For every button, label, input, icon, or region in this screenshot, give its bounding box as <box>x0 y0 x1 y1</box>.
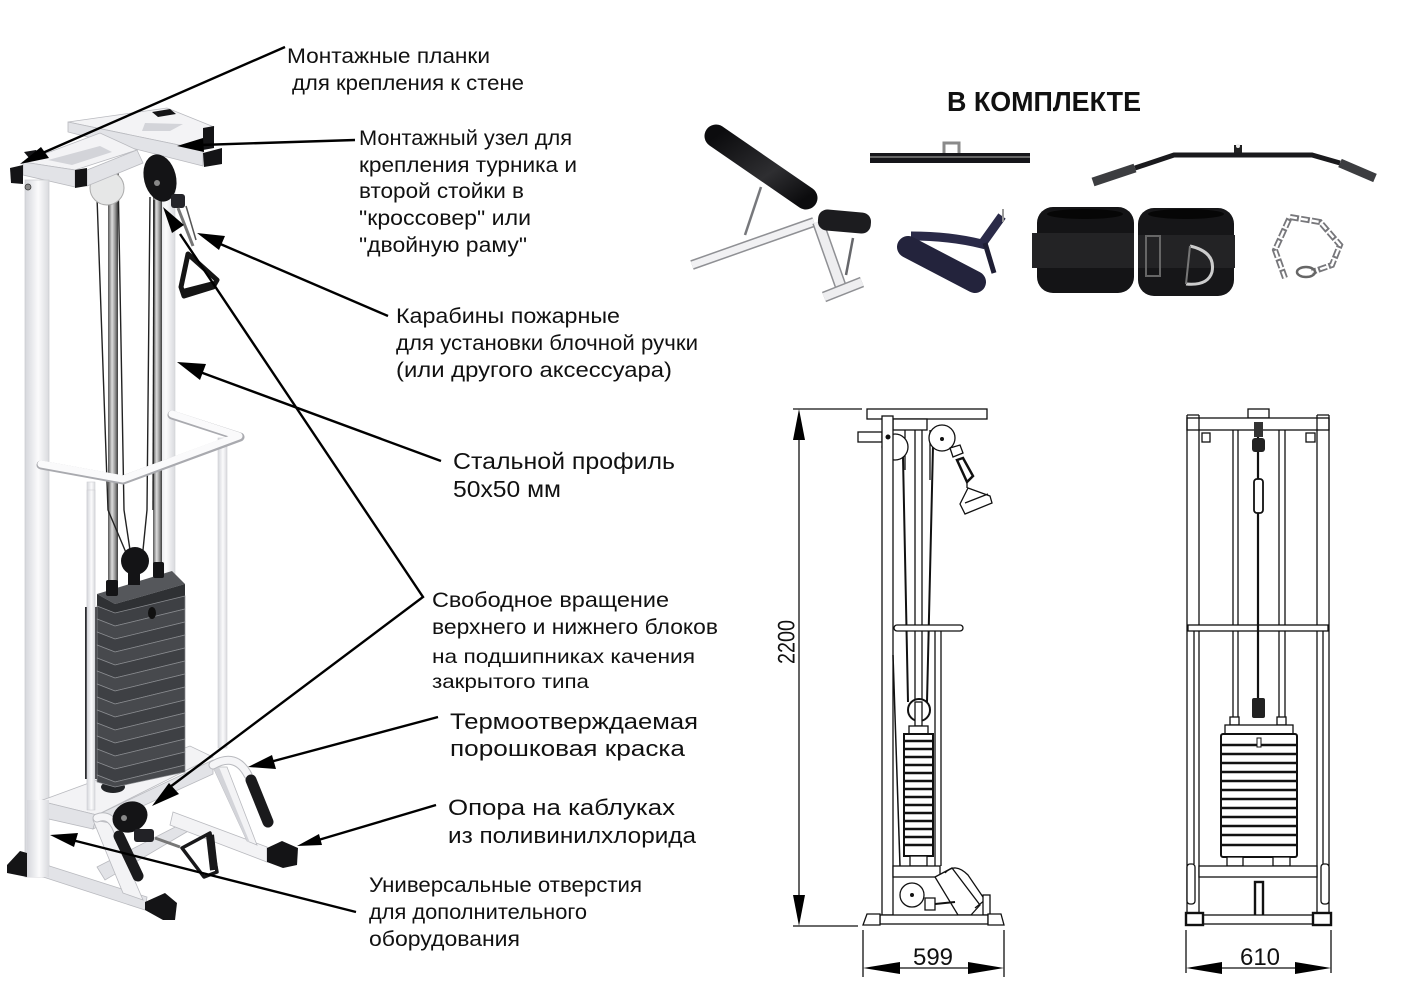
left post lower overlay <box>27 800 49 877</box>
callout: carabiners <box>396 305 698 382</box>
callout: free rotation: Свободное вращение <box>432 589 669 612</box>
cables <box>97 173 154 555</box>
accessory: bench <box>692 136 872 297</box>
rubber feet <box>7 841 298 920</box>
callout: carabiners: Карабины пожарные <box>396 305 620 328</box>
white top pulley <box>90 171 124 205</box>
drawing: side view <box>773 409 1004 977</box>
callout: free rotation: на подшипниках качения <box>432 646 695 668</box>
block pulley <box>121 547 149 585</box>
thin handle supports <box>87 438 227 807</box>
dimension 599: 599 <box>913 944 953 971</box>
callout: steel profile: Стальной профиль <box>453 448 675 474</box>
callout: universal holes: оборудования <box>369 928 520 951</box>
accessory: straight bar <box>870 143 1030 163</box>
base frame <box>40 746 267 910</box>
callout: mounting plates: для крепления к стене <box>292 72 524 95</box>
bent grip arms <box>97 760 248 835</box>
top plate <box>97 571 185 604</box>
arrow: mounting plates <box>20 47 285 164</box>
top plate <box>867 409 987 419</box>
dimension 2200: 2200 <box>773 620 800 664</box>
rear post <box>155 190 175 575</box>
black top pulley <box>139 151 185 208</box>
callout: mounting node: "кроссовер" или <box>359 207 531 230</box>
plates <box>97 596 185 787</box>
base assembly <box>863 866 1004 925</box>
callout: free rotation: верхнего и нижнего блоков <box>432 616 718 639</box>
arrow: universal holes <box>50 833 356 912</box>
arrow: carabiners <box>197 233 388 316</box>
weight stack <box>1221 717 1297 866</box>
dimension 2200 <box>773 409 862 926</box>
selector pin <box>148 607 156 619</box>
back stripe behind stack <box>85 607 97 779</box>
callout: universal holes: для дополнительного <box>369 901 587 924</box>
callout: heels <box>448 795 697 848</box>
callout: powder paint <box>450 709 698 761</box>
black grips <box>119 780 268 876</box>
callout: mounting plates <box>287 45 524 95</box>
arrow: powder paint <box>248 717 438 769</box>
callout: powder paint: порошковая краска <box>450 736 686 761</box>
block and weight stack <box>904 699 933 866</box>
accessory: lat bar <box>1093 144 1375 182</box>
callout: universal holes <box>369 874 642 951</box>
bolt <box>25 184 31 190</box>
cable and carabiner <box>1252 422 1265 718</box>
callout: steel profile: 50х50 мм <box>453 476 561 502</box>
top block <box>1248 409 1269 418</box>
weight stack <box>97 547 185 793</box>
dimension 599 <box>863 930 1004 977</box>
accessory: ankle cuffs <box>1032 207 1235 296</box>
left post <box>25 180 49 877</box>
arrow: steel profile <box>177 362 441 461</box>
arrow: mounting node <box>177 138 355 152</box>
callout: universal holes: Универсальные отверстия <box>369 874 642 897</box>
callout: free rotation: закрытого типа <box>432 671 589 693</box>
posts and beam <box>1187 415 1329 915</box>
pulley and handle <box>929 425 992 514</box>
callout: free rotation <box>432 589 718 693</box>
base <box>1186 866 1331 925</box>
frame <box>858 416 963 915</box>
front thin post <box>87 490 95 810</box>
arrow: heels <box>297 805 436 846</box>
lower pulley <box>107 796 154 842</box>
lower carabiner and handle <box>155 833 217 877</box>
carabiner and handle <box>178 206 217 296</box>
top frame <box>23 108 214 187</box>
panel: machine 3D view <box>7 108 298 920</box>
heading: included: В КОМПЛЕКТЕ <box>947 86 1141 117</box>
dimension 610: 610 <box>1240 944 1280 971</box>
callout: mounting node: второй стойки в <box>359 180 524 203</box>
callout: heels: из поливинилхлорида <box>448 823 697 848</box>
callout: steel profile <box>453 448 675 502</box>
callout: mounting node: "двойную раму" <box>359 234 527 257</box>
dimension 610 <box>1186 930 1331 974</box>
callout: mounting plates: Монтажные планки <box>287 45 490 68</box>
callout: powder paint: Термоотверждаемая <box>450 709 698 734</box>
rod caps <box>106 562 164 596</box>
upper handrail <box>41 414 240 480</box>
callout: mounting node: Монтажный узел для <box>359 127 572 150</box>
arrows: free rotation <box>152 207 423 806</box>
callout: carabiners: для установки блочной ручки <box>396 332 698 355</box>
accessory: chain <box>1275 217 1340 278</box>
accessory: strap handle <box>908 209 1003 282</box>
callout: carabiners: (или другого аксессуара) <box>396 359 672 382</box>
callout: heels: Опора на каблуках <box>448 795 675 820</box>
drawing: front view <box>1186 409 1331 974</box>
black end caps <box>10 109 222 188</box>
rubber feet <box>101 762 171 793</box>
callout: mounting node <box>359 127 577 257</box>
chrome guide rods <box>108 185 162 582</box>
callout: mounting node: крепления турника и <box>359 154 577 177</box>
